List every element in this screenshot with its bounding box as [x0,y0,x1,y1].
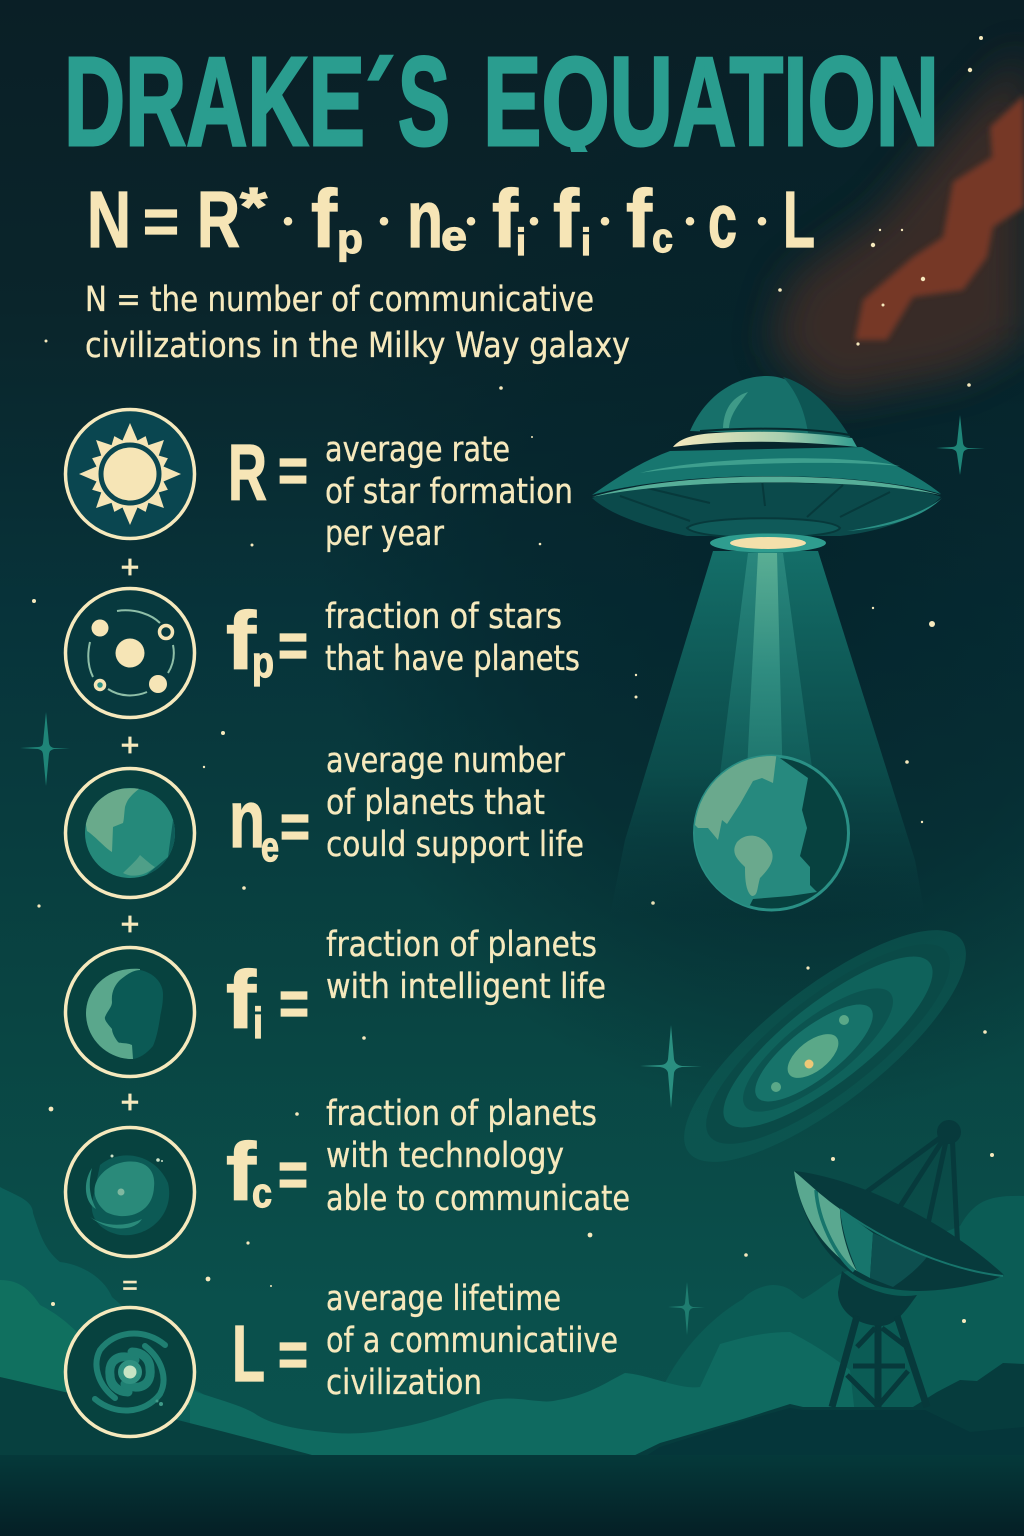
equation: = [143,185,179,257]
circle [66,1308,194,1436]
equation: f [492,174,519,265]
title [68,54,934,152]
subscript i: i [253,999,263,1048]
Earth shadow disc [694,756,848,910]
galaxy inner dark band [726,969,910,1131]
circle [66,948,194,1076]
UFO dome shade [783,377,850,437]
equation [87,174,815,265]
UFO lower hull [592,483,941,536]
UFO cream band [673,432,857,447]
row fi icon [66,948,194,1076]
description [326,1279,618,1403]
equation: • [466,205,476,238]
subscript e: e [261,823,279,870]
plus signs: + [121,1084,139,1120]
row: fi [226,925,606,1048]
telescope struts [857,1132,958,1252]
swirl arc [90,1217,142,1228]
equation: * [240,177,267,237]
equation: • [379,205,389,238]
galaxy glow [118,1360,142,1384]
Earth south continent [734,836,773,896]
description: per year [325,514,444,554]
equation: • [757,205,767,238]
definition of N [85,280,630,366]
description [325,430,573,554]
sparkle stars [20,415,985,1335]
red nebula [770,50,1024,400]
UFO dark gap [700,429,850,435]
Earth lit ocean [696,758,817,906]
swirl centre [118,1188,124,1196]
star field [32,36,994,1323]
lower mid cloud [190,1332,860,1460]
description: could support life [326,825,584,865]
description: fraction of planets [326,925,597,965]
equation: • [283,205,293,238]
description [326,741,584,865]
UFO [592,376,942,552]
small stars [110,1154,163,1162]
description [326,925,606,1007]
definition of N: N = the number of communicative [85,280,594,320]
symbol f: f [226,596,257,687]
UFO collar [687,518,840,538]
UFO lower rim glow [847,498,942,531]
telescope bowl [794,1171,1004,1291]
galaxy dark band [680,914,976,1174]
large Earth [693,754,850,912]
description [326,1094,630,1219]
equation: c [708,179,737,264]
subscript c: c [252,1169,272,1216]
telescope dark panel [870,1233,927,1287]
row: ne [229,741,584,870]
equation: e [441,212,467,259]
foreground hills [0,1363,1024,1536]
title: DRAKE [64,31,365,172]
description: of a communicatiive [326,1321,618,1361]
UFO hull panel lines [620,480,890,521]
galaxy middle ring [702,931,954,1153]
equals: = [278,1138,308,1210]
row L icon [66,1308,194,1436]
description: with technology [326,1136,564,1176]
equation: p [337,215,363,262]
telescope feed [937,1120,961,1144]
UFO dome highlight [723,392,748,428]
galaxy nucleus [804,1060,814,1068]
circle [66,410,194,538]
equals: = [278,1318,308,1390]
UFO light ring [710,534,826,552]
telescope panel stripe [816,1190,854,1271]
swirl disc [95,1161,154,1216]
circle [66,588,194,718]
symbol f: f [226,1127,257,1218]
equals: = [280,790,310,862]
row fc icon [66,1128,194,1256]
equation: f [626,174,653,265]
telescope dish rim [840,1209,1003,1276]
sun dark ring [101,445,159,503]
galaxy inner ring [742,989,886,1117]
UFO dome [690,376,850,437]
symbol f: f [226,955,257,1046]
description: civilization [326,1363,482,1403]
moon crescent [86,969,140,1059]
description: fraction of planets [326,1094,597,1134]
definition of N: civilizations in the Milky Way galaxy [85,326,630,366]
UFO beam [610,551,925,915]
equals: = [278,609,308,681]
continents [86,788,139,852]
description: fraction of stars [325,597,562,637]
equation: c [652,214,673,261]
symbol R: R [228,428,267,517]
background clouds [0,1187,1024,1460]
UFO upper saucer [592,447,941,495]
description: of star formation [325,472,573,512]
equation: • [685,205,695,238]
equals: = [279,967,309,1039]
description [325,597,580,679]
orbit arcs [88,610,174,695]
equation: f [553,174,580,265]
equation: n [407,174,443,265]
sun rays [79,423,181,525]
left arc [86,1168,96,1209]
plus signs: + [121,727,139,763]
spiral galaxy [653,894,997,1198]
plus signs: = [122,1270,138,1300]
planet 4 [149,675,167,693]
row: R [228,428,573,554]
description: average number [326,741,565,781]
description: average lifetime [326,1279,561,1319]
outer swirl [92,1155,169,1235]
telescope light panel [794,1171,857,1271]
small stars [156,1400,163,1406]
row: L [232,1279,618,1403]
row R icon [66,410,194,538]
spiral arms [95,1334,165,1410]
star [116,638,144,668]
row: fp [226,596,580,687]
darker right-hand sky [320,0,1024,1120]
left cloud bank [0,1187,312,1456]
UFO lamp [730,537,806,549]
telescope mount [838,1271,917,1326]
southern land [123,855,155,876]
symbol n: n [229,774,265,865]
planet 1 [92,620,108,636]
galaxy core [780,1026,846,1086]
row fp icon [66,588,194,718]
description: of planets that [326,783,545,823]
planet shadow [146,820,175,875]
row ne icon [66,768,194,898]
UFO saucer stripe 2 [640,458,900,473]
galaxy core [124,1366,136,1378]
title: ' [327,33,410,146]
plus signs: + [121,906,139,942]
equation: • [600,205,610,238]
row: fc [226,1094,630,1219]
description: that have planets [325,639,580,679]
plus signs [121,549,139,1300]
right cloud bank [640,1196,1024,1460]
planet 2 [160,626,172,638]
equation: R [197,175,240,264]
plus signs: + [121,549,139,585]
description: able to communicate [326,1179,630,1219]
head silhouette [105,970,163,1059]
telescope dish face [794,1171,1003,1274]
telescope tower [832,1316,927,1407]
equation: L [783,175,815,264]
equation: i [516,222,526,264]
description: with intelligent life [326,967,606,1007]
planet 3 [96,680,104,690]
equation: N [87,175,131,264]
galaxy light spots [771,1015,849,1092]
title: S [398,31,450,172]
description: average rate [325,430,510,470]
Earth north continent [695,756,776,840]
equation: f [311,174,338,265]
equation: i [581,222,591,264]
telescope bracing [847,1328,908,1406]
circle [66,1128,194,1256]
circle [66,768,194,898]
planet disc [85,788,175,878]
equation: • [529,205,539,238]
equals: = [278,434,308,506]
UFO saucer stripes [592,476,941,497]
telescope mid panel [840,1209,873,1278]
subscript p: p [252,638,274,687]
symbol L: L [232,1309,265,1398]
left light cloud [0,1280,210,1405]
galaxy outer ring [653,894,997,1198]
radio telescope [794,1120,1004,1407]
